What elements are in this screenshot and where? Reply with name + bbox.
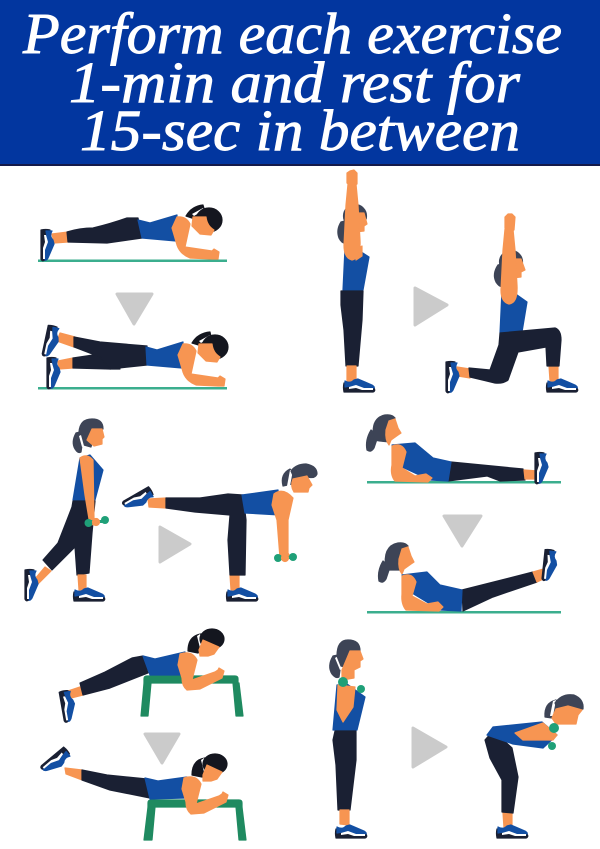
figure: standing bicep curl — [330, 640, 367, 838]
figure: bench plank with leg lift — [40, 747, 246, 840]
title line 1: Perform each exercise — [22, 1, 562, 66]
arrow: standing to hinge — [160, 527, 190, 562]
figure: bent-over row — [485, 695, 583, 838]
header banner — [0, 0, 600, 166]
arrow: standing to lunge — [415, 288, 447, 325]
arrow: bench plank down — [145, 734, 179, 763]
arrow: curl to hinge — [413, 728, 446, 767]
arrow: plank down — [117, 294, 152, 324]
title line 3: 15-sec in between — [80, 98, 520, 163]
figure: plank with leg lift — [38, 325, 228, 390]
figure: forearm plank — [38, 205, 227, 262]
figure: reclined leg raise — [367, 543, 561, 614]
figure: bent-over leg raise — [122, 464, 317, 601]
figure: incline plank on bench — [59, 629, 243, 723]
figure: reclined on forearms — [366, 415, 561, 484]
figure: standing arms raised — [338, 170, 375, 392]
title line 2: 1-min and rest for — [69, 50, 520, 115]
figure: lunge arms raised — [446, 214, 578, 393]
figure: standing with dumbbells — [25, 419, 109, 601]
arrow: reclined down — [444, 516, 481, 546]
